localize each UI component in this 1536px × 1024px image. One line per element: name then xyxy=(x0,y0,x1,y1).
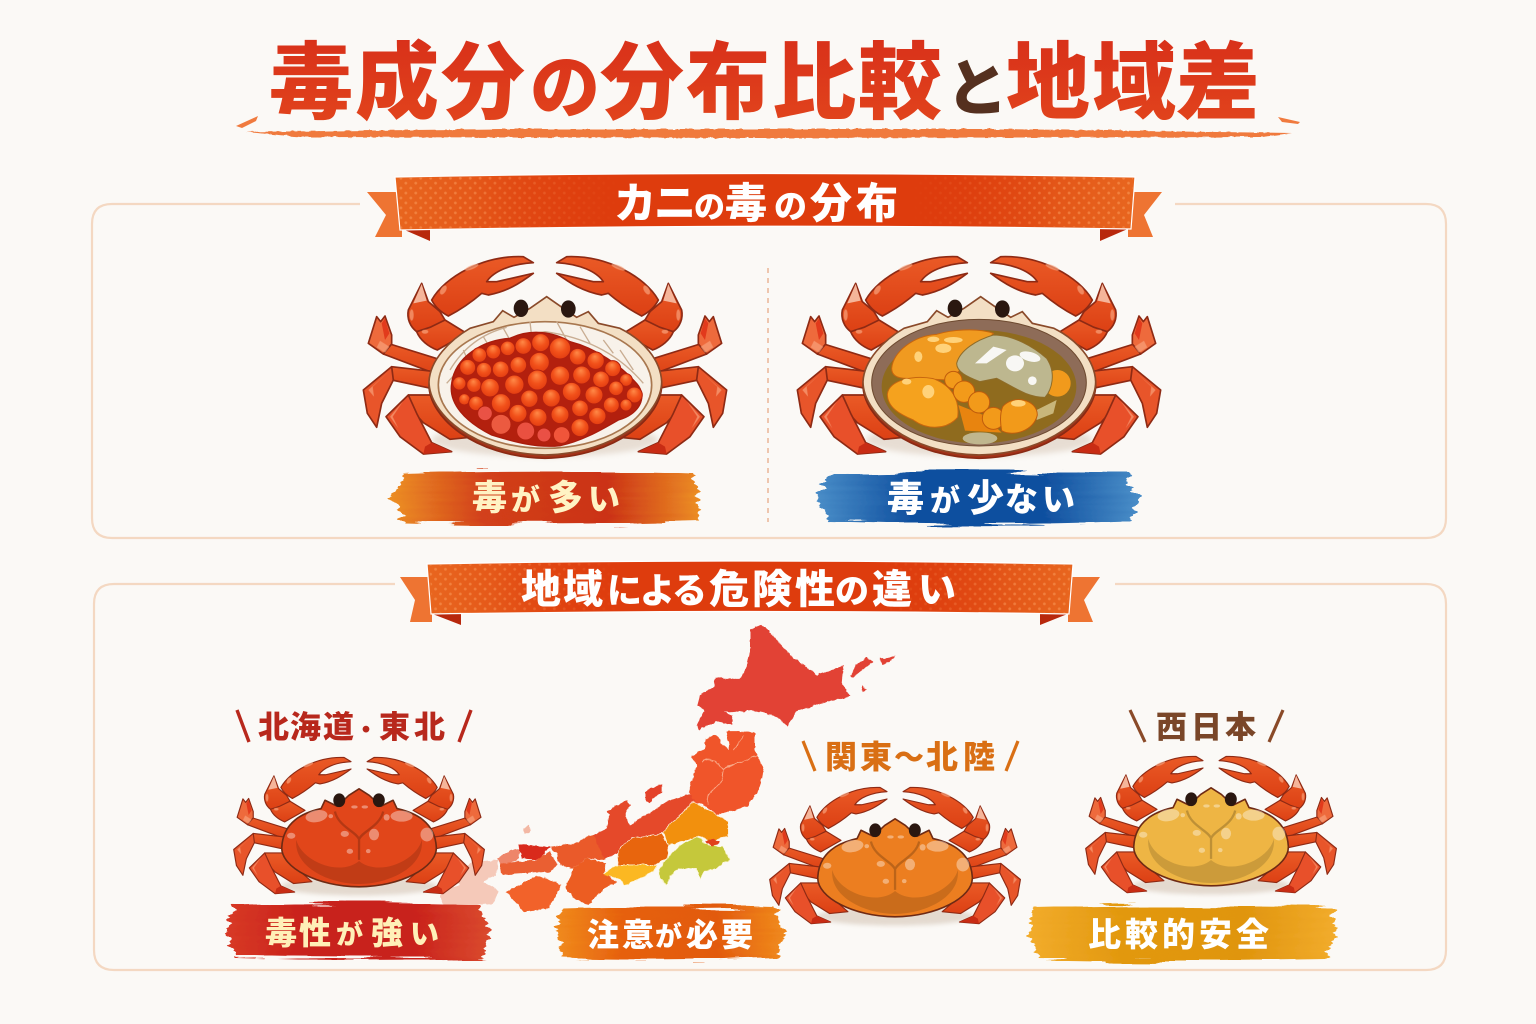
label: strong toxicity: 性 xyxy=(299,915,331,951)
region label: Kanto Hokuriku: ～ xyxy=(894,742,924,775)
title text: の xyxy=(530,49,600,127)
title xyxy=(236,36,1300,138)
region label: West Japan xyxy=(1130,710,1283,745)
region label: Kanto Hokuriku: 関 xyxy=(825,739,857,775)
region label: Hokkaido Tohoku: 海 xyxy=(290,710,321,745)
region label: Hokkaido Tohoku: 北 xyxy=(258,710,289,745)
label: strong toxicity: 毒 xyxy=(265,915,297,951)
ribbon heading: 険 xyxy=(752,568,792,612)
Tokai xyxy=(658,837,729,885)
ribbon heading: 違 xyxy=(872,568,912,612)
label: little poison: 毒 xyxy=(887,478,924,519)
label: relatively safe: 安 xyxy=(1199,916,1232,953)
region label: Kanto Hokuriku: 東 xyxy=(860,739,892,775)
crab: open shell with roe xyxy=(363,257,727,458)
region label: Kanto Hokuriku: 陸 xyxy=(963,739,995,775)
label: relatively safe: 比 xyxy=(1088,916,1121,953)
region label: West Japan: 西 xyxy=(1156,710,1187,745)
label: little poison: い xyxy=(1042,481,1075,518)
title text: 地 xyxy=(1006,36,1090,130)
ribbon heading: 分 xyxy=(810,180,852,227)
region label: Hokkaido Tohoku: 北 xyxy=(414,710,445,745)
ribbon heading: 地 xyxy=(521,568,561,612)
Tokyo xyxy=(705,838,720,847)
panel: poison distribution xyxy=(92,174,1446,538)
Shikoku xyxy=(507,875,562,912)
label: relatively safe: 全 xyxy=(1236,916,1269,953)
label: much poison: が xyxy=(511,483,540,517)
ribbon heading: い xyxy=(918,570,956,612)
Sado xyxy=(645,783,662,804)
title text: 分 xyxy=(600,36,684,130)
label: strong toxicity: い xyxy=(410,919,439,951)
label: caution needed: 要 xyxy=(721,917,753,953)
title right tick xyxy=(1278,117,1300,124)
Kinki south xyxy=(603,865,657,885)
title text: 比 xyxy=(772,36,856,130)
ribbon heading: の xyxy=(835,573,869,611)
ribbon heading: 域 xyxy=(563,568,603,612)
title underline brush xyxy=(246,129,1292,138)
region label: West Japan: 本 xyxy=(1225,710,1256,745)
label: little poison: が xyxy=(930,484,960,518)
title left tick xyxy=(236,116,258,128)
ribbon heading: よ xyxy=(640,572,675,611)
Kii xyxy=(565,858,617,905)
section ribbon xyxy=(400,561,1100,625)
ribbon heading: 危 xyxy=(709,568,749,612)
label: caution needed: 意 xyxy=(622,917,654,953)
panel: regional differences xyxy=(94,561,1446,970)
Kansai xyxy=(550,835,605,868)
map of Japan xyxy=(440,624,895,912)
label: much poison: 毒 xyxy=(472,479,507,518)
label: relatively safe: 較 xyxy=(1125,916,1158,953)
title text: と xyxy=(946,55,1008,124)
crab innards xyxy=(872,319,1086,446)
label: much poison xyxy=(392,471,700,524)
title text: 域 xyxy=(1092,36,1176,130)
label: strong toxicity xyxy=(226,903,490,960)
label: strong toxicity: 強 xyxy=(371,915,403,951)
region label: Kanto Hokuriku: 北 xyxy=(926,739,958,775)
ribbon heading: の xyxy=(694,190,725,225)
crab: open shell with organs xyxy=(797,257,1161,458)
Tohoku xyxy=(688,732,764,815)
Kanto xyxy=(663,802,728,847)
region label: Hokkaido Tohoku: 道 xyxy=(323,710,354,745)
Hokkaido xyxy=(697,624,850,730)
label: relatively safe xyxy=(1030,906,1336,962)
region label: Hokkaido Tohoku xyxy=(237,710,471,745)
panel frame xyxy=(92,204,1446,538)
title text: 分 xyxy=(441,36,525,130)
crab: yellow xyxy=(1086,756,1336,894)
label: much poison: い xyxy=(588,481,620,517)
region label: Kanto Hokuriku xyxy=(803,739,1018,775)
title text: 毒 xyxy=(269,36,353,130)
divider xyxy=(767,268,769,522)
roe mass xyxy=(451,332,642,446)
label: caution needed xyxy=(556,906,784,959)
Chubu xyxy=(617,833,668,865)
ribbon heading: ニ xyxy=(654,180,696,227)
ribbon heading: 布 xyxy=(856,180,898,227)
label: little poison: な xyxy=(1005,481,1038,518)
crab: orange xyxy=(770,787,1020,926)
title text: 較 xyxy=(858,36,942,130)
panel frame xyxy=(94,584,1446,970)
ribbon heading: 性 xyxy=(795,568,835,612)
label: relatively safe: 的 xyxy=(1162,916,1195,953)
region label: Hokkaido Tohoku: 東 xyxy=(379,710,410,745)
ribbon heading: る xyxy=(672,572,707,611)
ribbon heading: の xyxy=(774,188,807,225)
Hokuriku xyxy=(588,793,695,860)
label: caution needed: 必 xyxy=(686,917,718,953)
ribbon heading: 毒 xyxy=(725,180,767,227)
ribbon heading: カ xyxy=(614,180,656,227)
title text: 差 xyxy=(1176,36,1260,130)
title text: 成 xyxy=(355,36,439,130)
crab: red xyxy=(234,757,484,896)
region label: Hokkaido Tohoku: ・ xyxy=(354,717,378,744)
title text: 布 xyxy=(686,36,770,130)
section ribbon xyxy=(367,174,1162,241)
Chugoku north xyxy=(497,848,520,865)
ribbon heading: に xyxy=(607,572,642,611)
label: strong toxicity: が xyxy=(336,919,363,950)
label: much poison: 多 xyxy=(548,479,583,518)
region label: West Japan: 日 xyxy=(1191,710,1222,745)
label: little poison xyxy=(816,471,1140,524)
faded wash xyxy=(440,860,498,907)
label: little poison: 少 xyxy=(967,478,1004,519)
label: caution needed: が xyxy=(655,921,682,952)
label: caution needed: 注 xyxy=(587,917,619,953)
